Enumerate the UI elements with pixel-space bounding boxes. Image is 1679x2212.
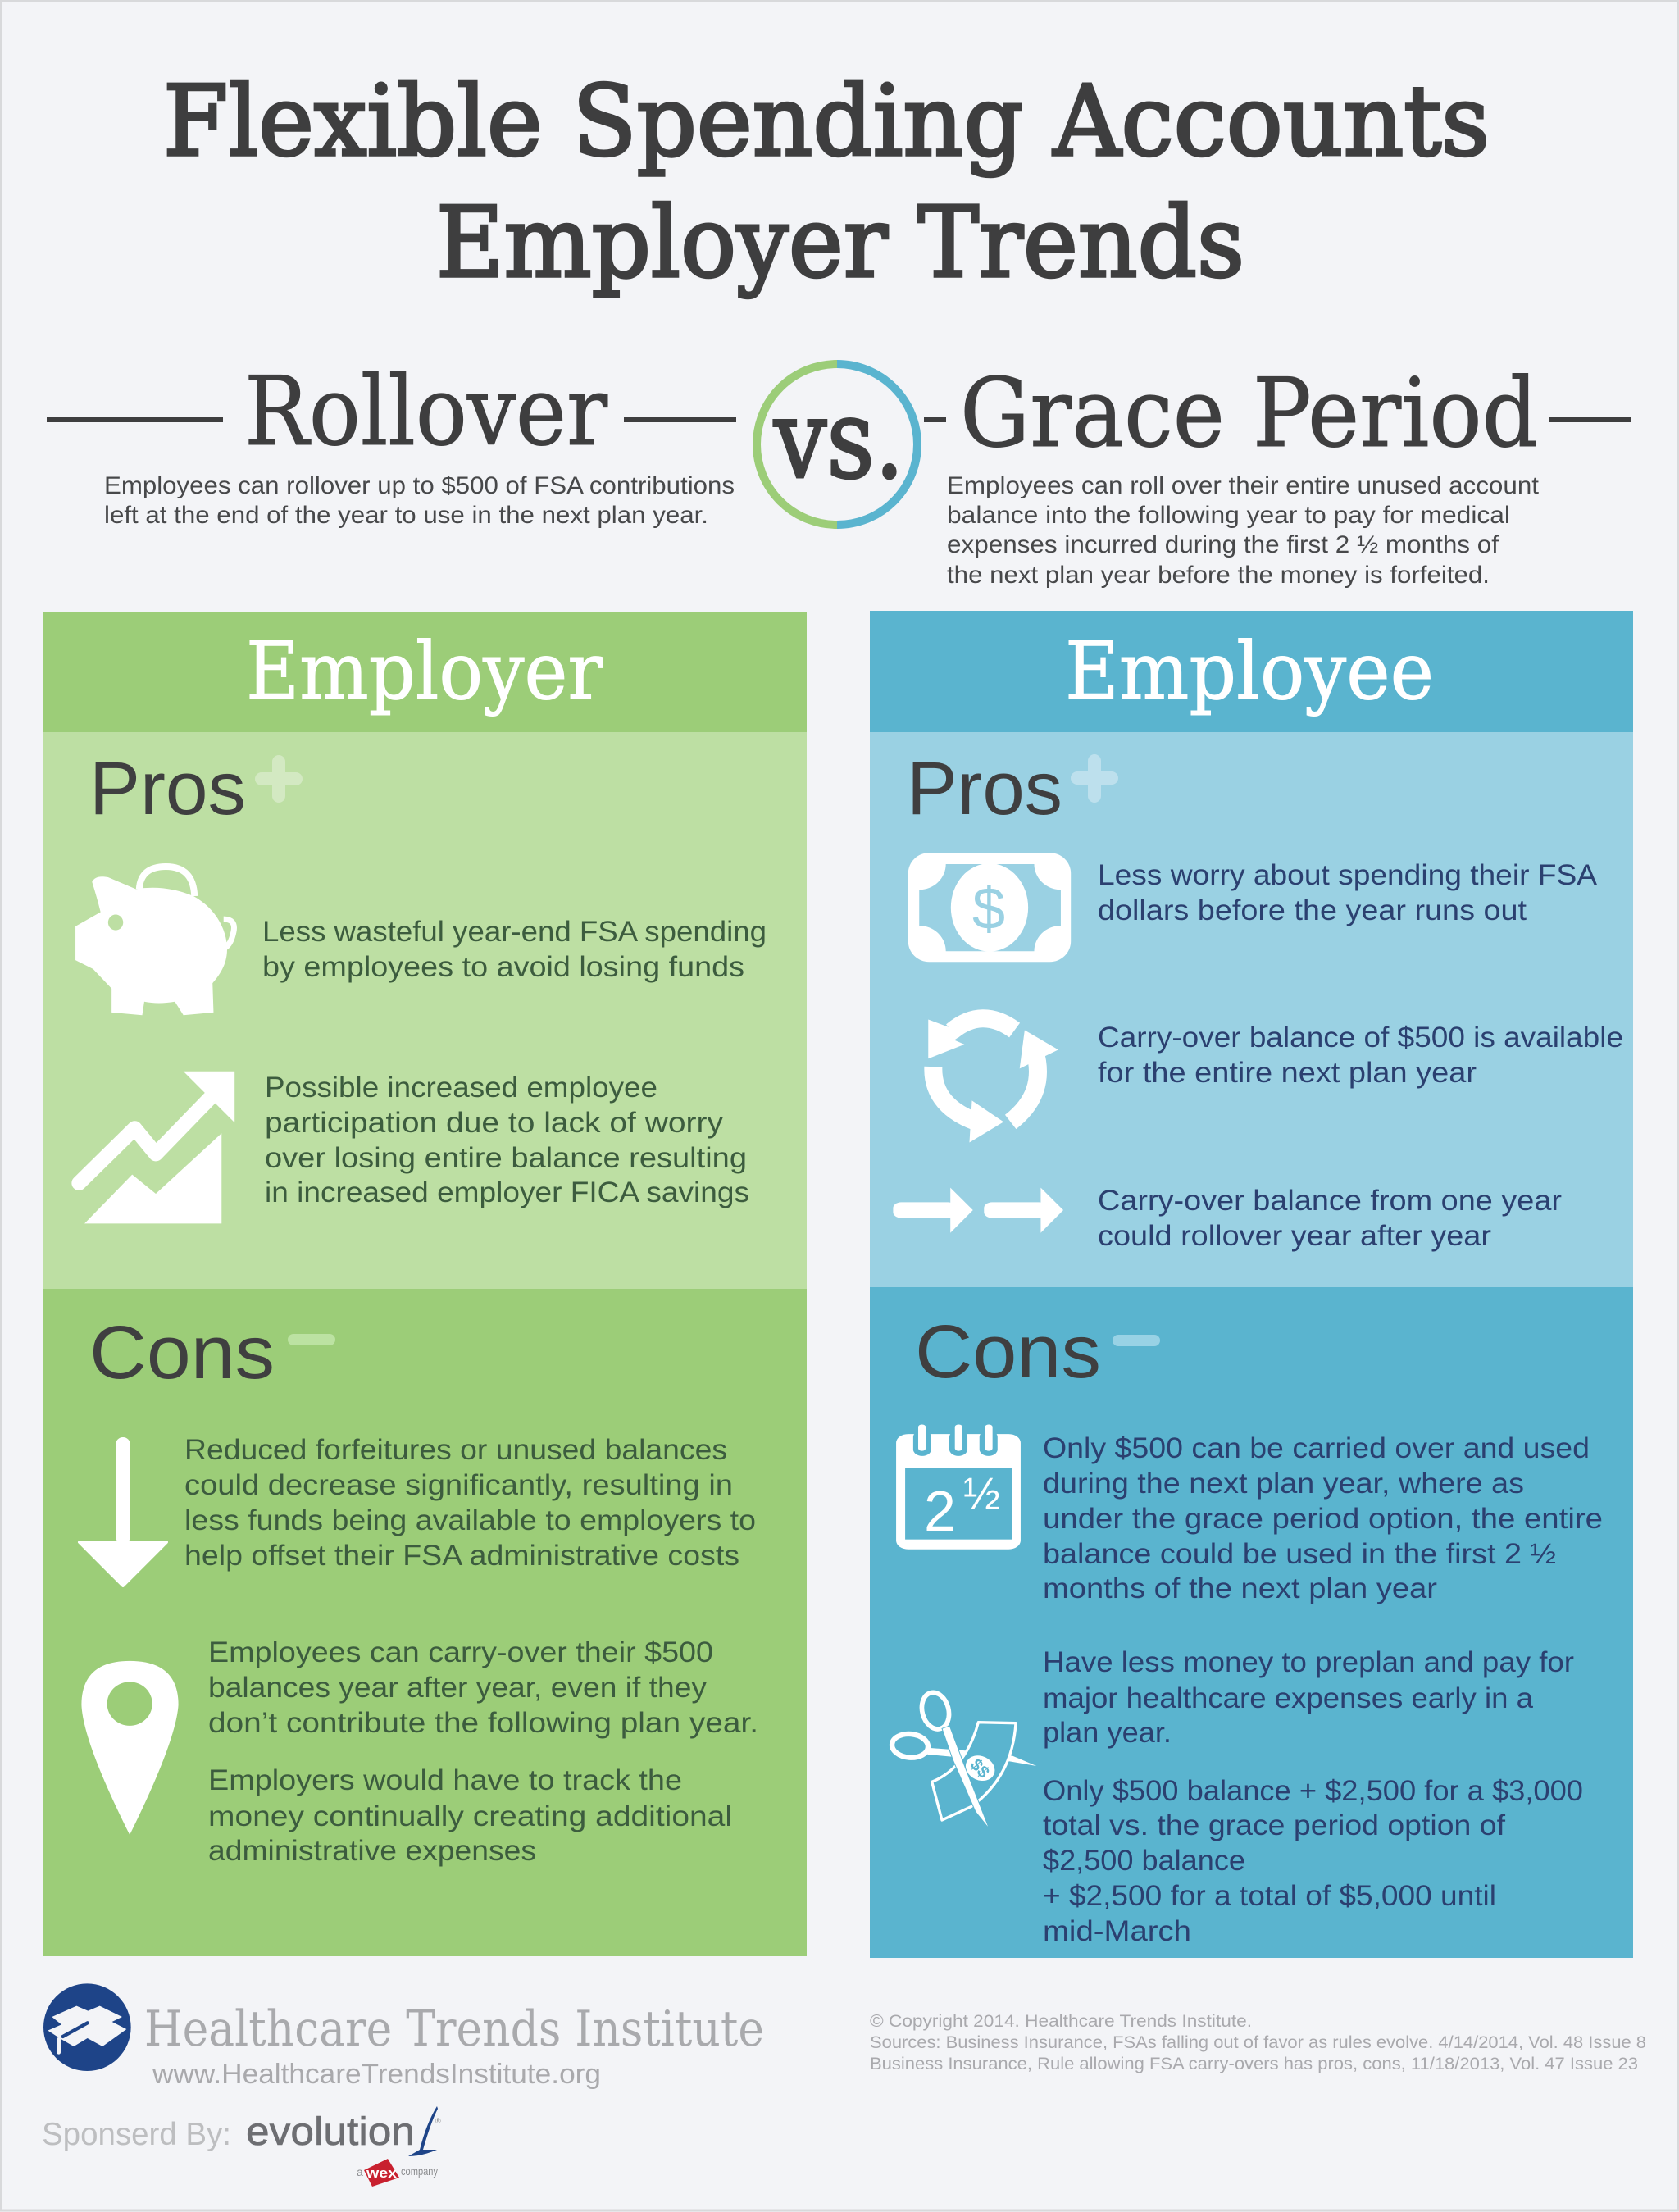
employee header	[870, 611, 1633, 732]
rollover description: left at the end of the year to use in the next plan year.	[104, 502, 708, 529]
comparison heading: rollover: Rollover	[244, 357, 607, 467]
employer cons text 2: administrative expenses	[208, 1835, 536, 1867]
logo mark	[43, 1983, 131, 2071]
icon: rising chart	[79, 1072, 234, 1223]
employee pros text 2	[1098, 1022, 1623, 1089]
title	[163, 66, 1490, 300]
employer pros text 1: by employees to avoid losing funds	[262, 951, 744, 983]
grace period description	[947, 472, 1540, 589]
employer pros text 2: Possible increased employee	[265, 1072, 657, 1104]
employer pros text 1	[262, 916, 767, 983]
employee cons text 1: Only $500 can be carried over and used	[1043, 1432, 1590, 1464]
employer cons text 1: less funds being available to employers to	[184, 1504, 756, 1536]
employee cons text 2: Only $500 balance + $2,500 for a $3,000	[1043, 1775, 1583, 1807]
panel: employer	[43, 612, 807, 1956]
employer header	[43, 612, 807, 732]
icon: dollar bill	[908, 853, 1071, 962]
employee cons text 1: balance could be used in the first 2 ½	[1043, 1538, 1556, 1570]
employee pros text 1: Less worry about spending their FSA	[1098, 859, 1598, 891]
sponsor: evolution1: Sponserd By:	[42, 2117, 231, 2152]
employer cons text 2: Employees can carry-over their $500	[208, 1636, 713, 1668]
icon: calendar: 2	[924, 1479, 956, 1543]
employer pros heading: Pros	[89, 747, 246, 831]
icon: location pin	[81, 1661, 179, 1835]
employee pros text 3	[1098, 1185, 1562, 1252]
employer cons text 1	[184, 1434, 756, 1572]
footer logo: Healthcare Trends Institute	[43, 1983, 764, 2090]
rollover description	[104, 472, 735, 529]
employee cons text 2: total vs. the grace period option of	[1043, 1809, 1505, 1841]
comparison heading: rollover	[47, 357, 736, 467]
sources and copyright: Sources: Business Insurance, FSAs falling out of favor as rules evolve. 4/14/2014, Vol. 48 Issue 8	[870, 2033, 1646, 2052]
employee cons text 2: mid-March	[1043, 1915, 1191, 1947]
employee pros text 3: could rollover year after year	[1098, 1220, 1491, 1252]
sponsor: evolution1: ®	[435, 2117, 441, 2125]
employee pros text 2: for the entire next plan year	[1098, 1057, 1477, 1089]
sponsor: evolution1: a	[357, 2165, 363, 2178]
employee pros text 1	[1098, 859, 1598, 926]
footer logo: Healthcare Trends Institute: www.HealthcareTrendsInstitute.org	[152, 2059, 601, 2090]
grace period description: balance into the following year to pay for medical	[947, 502, 1510, 529]
icon: scissors cutting a bill	[891, 1690, 1036, 1829]
employer pros text 1: Less wasteful year-end FSA spending	[262, 916, 767, 948]
employer cons heading: Cons	[89, 1311, 275, 1395]
employee cons text 2: major healthcare expenses early in a	[1043, 1682, 1534, 1714]
sources and copyright: Business Insurance, Rule allowing FSA carry-overs has pros, cons, 11/18/2013, Vol. 47 Issue 23	[870, 2055, 1638, 2073]
sponsor: evolution1: wex	[366, 2165, 398, 2181]
employer pros section	[43, 732, 807, 1289]
grace period description: the next plan year before the money is forfeited.	[947, 562, 1490, 589]
rollover description: Employees can rollover up to $500 of FSA contributions	[104, 472, 735, 499]
icon: double arrows	[893, 1188, 1063, 1233]
employee cons text 2	[1043, 1646, 1583, 1947]
employer pros text 2: over losing entire balance resulting	[265, 1142, 747, 1174]
icon: calendar	[896, 1424, 1021, 1550]
employee pros section	[870, 732, 1633, 1287]
icon: down arrow	[80, 1437, 166, 1586]
employer cons text 1: could decrease significantly, resulting in	[184, 1469, 733, 1501]
employee cons heading: Cons	[915, 1310, 1101, 1394]
employee pros text 1: dollars before the year runs out	[1098, 894, 1527, 926]
employer pros text 2: participation due to lack of worry	[265, 1107, 724, 1139]
employer pros text 2: in increased employer FICA savings	[265, 1177, 749, 1208]
employer cons text 2: money continually creating additional	[208, 1800, 732, 1832]
employer cons text 1: help offset their FSA administrative costs	[184, 1540, 739, 1572]
employee cons text 2: + $2,500 for a total of $5,000 until	[1043, 1880, 1496, 1912]
icon: circular arrows	[928, 1018, 1058, 1143]
grace period description: expenses incurred during the first 2 ½ months of	[947, 531, 1499, 558]
employee pros text 3: Carry-over balance from one year	[1098, 1185, 1562, 1217]
sponsor: evolution1: company	[401, 2164, 438, 2178]
employer cons text 1: Reduced forfeitures or unused balances	[184, 1434, 727, 1466]
employee pros heading: Pros	[907, 747, 1062, 831]
employer cons text 2: Employers would have to track the	[208, 1764, 682, 1796]
employee cons section	[870, 1287, 1633, 1958]
employee cons text 1	[1043, 1432, 1603, 1604]
comparison heading: grace period: Grace Period	[960, 358, 1538, 469]
employee cons text 1: under the grace period option, the entire	[1043, 1503, 1603, 1535]
sources and copyright	[870, 2012, 1646, 2073]
employee pros text 2: Carry-over balance of $500 is available	[1098, 1022, 1623, 1054]
employer cons text 2: don’t contribute the following plan year.	[208, 1707, 758, 1739]
sources and copyright: © Copyright 2014. Healthcare Trends Institute.	[870, 2012, 1252, 2031]
employee cons text 2: Have less money to preplan and pay for	[1043, 1646, 1574, 1678]
employer cons section	[43, 1289, 807, 1956]
title: Employer Trends	[436, 187, 1244, 300]
employer cons text 2: balances year after year, even if they	[208, 1672, 708, 1704]
sponsor: evolution1	[42, 2106, 441, 2187]
employee cons text 1: months of the next plan year	[1043, 1573, 1437, 1604]
employee cons text 1: during the next plan year, where as	[1043, 1468, 1524, 1500]
icon: piggy bank	[75, 867, 234, 1015]
icon: dollar bill: $	[972, 876, 1005, 942]
panel: employee	[870, 611, 1633, 1958]
employer header: Employer	[246, 626, 603, 717]
employee header: Employee	[1065, 626, 1434, 717]
employer pros text 2	[265, 1072, 749, 1208]
vs badge: vs.	[773, 375, 904, 503]
icon: scissors cutting a bill: $$	[967, 1755, 994, 1782]
grace period description: Employees can roll over their entire unused account	[947, 472, 1540, 499]
vs badge	[757, 364, 917, 525]
title: Flexible Spending Accounts	[163, 66, 1490, 179]
footer logo: Healthcare Trends Institute: Healthcare Trends Institute	[144, 2000, 764, 2058]
employee cons text 2: plan year.	[1043, 1717, 1172, 1749]
sponsor: evolution1: evolution	[246, 2110, 415, 2154]
employee cons text 2: $2,500 balance	[1043, 1845, 1245, 1877]
employer cons text 2	[208, 1636, 758, 1867]
icon: calendar: ½	[963, 1468, 1000, 1519]
